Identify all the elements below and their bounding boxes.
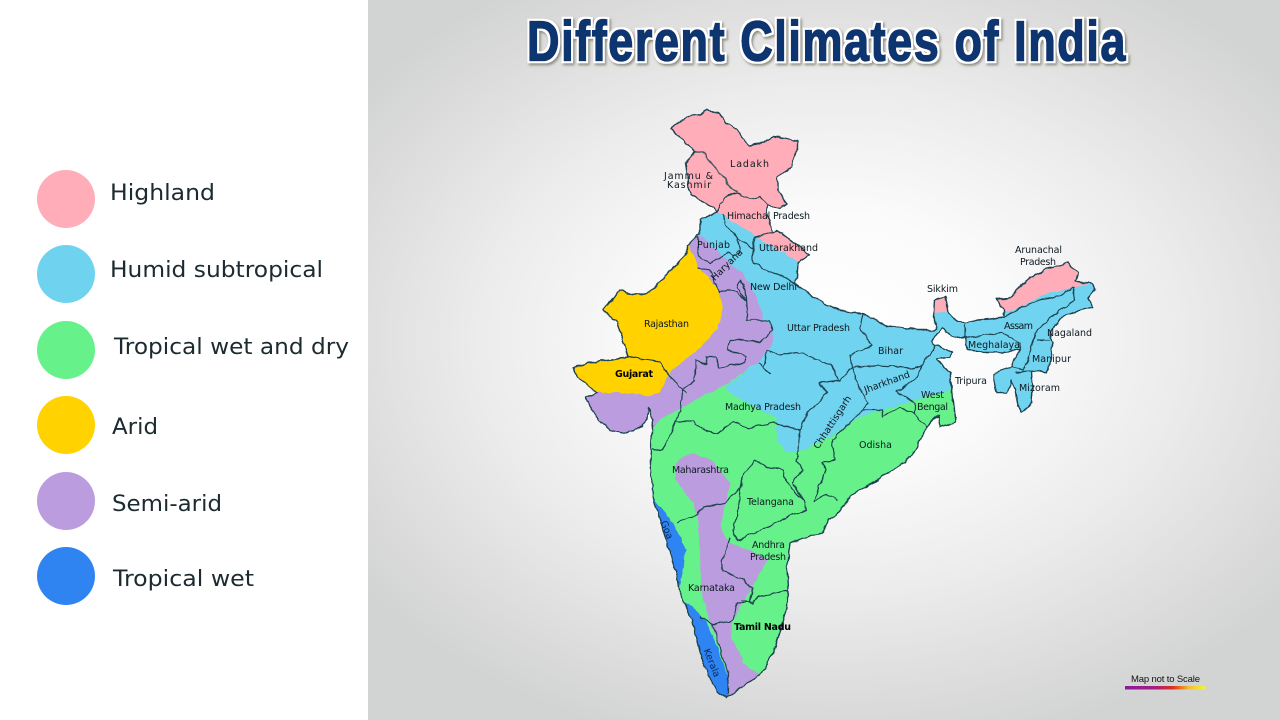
state labels: West [921,390,944,401]
region: highland north-east [996,262,1090,312]
state labels: Rajasthan [644,319,689,330]
region: tropical wet and dry base [614,234,956,696]
legend: Humid subtropical: Humid subtropical [110,258,323,283]
legend: Tropical wet: Tropical wet [112,567,254,592]
legend: Arid: Arid [112,415,158,440]
legend: Tropical wet [37,547,254,605]
state labels: Maharashtra [672,465,729,476]
panel: map background [368,0,1280,720]
legend: Highland [37,170,215,228]
region: tropical wet south [684,602,728,696]
map of India [560,100,1120,710]
state labels: Manipur [1032,354,1071,365]
state labels: Bihar [878,346,903,357]
state labels: Chhattisgarh [812,394,854,451]
state labels: Bengal [917,402,948,413]
legend: Semi-arid: Semi-arid [112,492,222,517]
state labels: Mizoram [1019,383,1060,394]
state labels: Goa [658,519,675,541]
map outline [573,110,1095,698]
legend: Tropical wet and dry: Tropical wet and dry [113,335,349,360]
map drawing: regions and borders [560,100,1120,710]
state labels: Kerala [701,647,722,679]
legend: Humid subtropical [37,245,323,303]
state labels: Andhra [752,540,785,551]
legend: Arid [37,396,158,454]
state labels: Tamil Nadu [734,622,791,633]
legend [37,170,349,605]
state labels: Odisha [859,440,892,451]
state labels: Ladakh [730,159,769,170]
state labels: Assam [1004,321,1033,332]
state labels: Jammu & [663,171,714,182]
state labels: Telangana [746,497,794,508]
state labels: Kashmir [667,180,711,191]
state labels: New Delhi [750,282,797,293]
scale note: Map not to Scale [1131,674,1200,685]
title: Different Climates of India [527,10,1127,74]
state labels [615,159,1092,679]
state labels: Madhya Pradesh [725,402,801,413]
legend: Semi-arid [37,472,222,530]
state labels: Gujarat [615,369,653,380]
state labels: Punjab [697,240,730,251]
state labels: Pradesh [1020,257,1056,268]
climate regions [574,110,1094,696]
region: highland [672,110,808,262]
state labels: Sikkim [927,284,958,295]
state borders [628,152,1075,695]
state labels: Himachal Pradesh [727,211,810,222]
state labels: Uttarakhand [759,243,818,254]
state labels: Jharkhand [862,369,912,396]
scale note [1125,674,1205,690]
state labels: Arunachal [1015,245,1062,256]
region: highland Sikkim [934,298,948,313]
state labels: Karnataka [688,583,735,594]
state labels: Haryana [709,247,745,283]
state labels: Nagaland [1047,328,1092,339]
state labels: Pradesh [750,552,786,563]
state labels: Uttar Pradesh [787,323,850,334]
state labels: Meghalaya [968,340,1020,351]
region: arid [574,245,723,396]
region: humid subtropical [699,212,1094,452]
region: semi-arid south [675,453,767,705]
region: tropical wet [654,498,686,588]
legend: Highland: Highland [110,181,215,206]
region: semi-arid north-west [586,235,774,433]
legend: Tropical wet and dry [37,321,349,379]
state labels: Tripura [954,376,987,387]
